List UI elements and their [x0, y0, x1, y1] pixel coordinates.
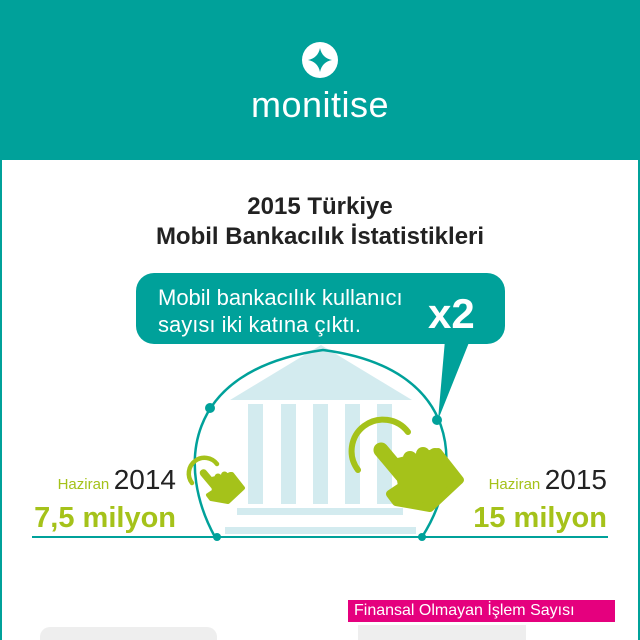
brand name: monitise — [251, 84, 389, 125]
stat 2015 — [473, 464, 607, 534]
header band — [0, 0, 640, 160]
speech bubble: Mobil bankacılık kullanıcı — [158, 285, 403, 310]
stat 2015: Haziran 2015 — [489, 464, 607, 495]
title: Mobil Bankacılık İstatistikleri — [156, 223, 484, 250]
bank — [225, 345, 416, 534]
icon: logo star — [302, 42, 338, 78]
pink tag: Finansal Olmayan İşlem Sayısı — [354, 602, 575, 619]
grey bar right — [358, 625, 526, 640]
title — [156, 193, 484, 250]
pink tag — [348, 600, 615, 622]
stat 2014: Haziran 2014 — [58, 464, 176, 495]
speech bubble: sayısı iki katına çıktı. — [158, 312, 361, 337]
title: 2015 Türkiye — [247, 193, 393, 220]
grey box left — [40, 627, 217, 640]
speech bubble — [136, 273, 505, 420]
icon: big hand — [352, 420, 460, 508]
speech bubble: x2 — [428, 290, 475, 337]
stat 2014: 7,5 milyon — [34, 502, 176, 534]
side borders — [0, 160, 2, 640]
stat 2014 — [34, 464, 176, 534]
icon: small hand — [189, 458, 243, 502]
stat 2015: 15 milyon — [473, 502, 607, 534]
arc — [32, 350, 608, 541]
